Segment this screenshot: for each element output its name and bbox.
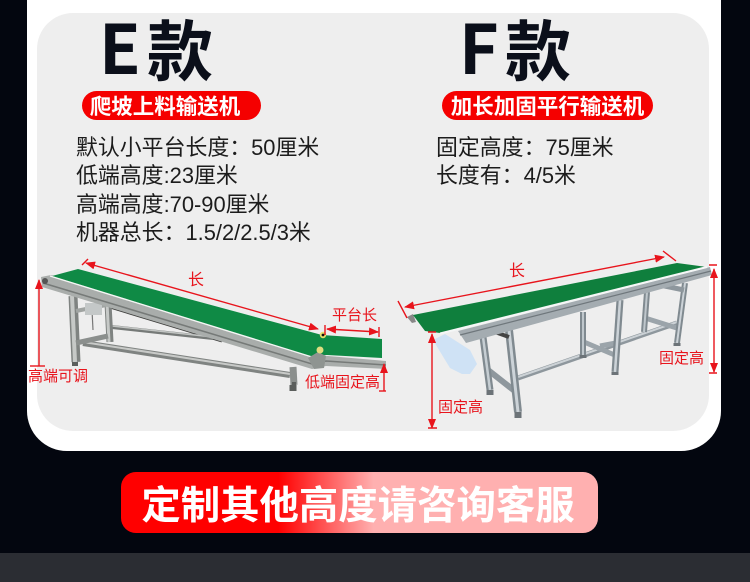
dimension labels E: 低端固定高 — [305, 371, 380, 392]
dimension labels F — [438, 257, 704, 417]
text block: model E specs: 默认小平台长度：50厘米 — [76, 135, 319, 160]
dimension labels E: 平台长 — [332, 304, 377, 325]
footer strip — [0, 553, 750, 582]
machine E belt and rail — [41, 269, 386, 369]
dimensions E — [30, 259, 386, 391]
label: model F type: 加长加固平行输送机 — [451, 90, 644, 121]
dimension labels F: 固定高 — [659, 347, 704, 368]
machine E frame — [72, 296, 296, 391]
text block: model E specs — [76, 135, 319, 245]
heading: model F: 款 — [505, 0, 571, 95]
machine F belt and rail — [407, 263, 712, 374]
dimension labels E: 长 — [188, 266, 204, 290]
heading: model F — [459, 0, 571, 95]
text block: model F specs: 长度有：4/5米 — [436, 163, 576, 188]
text block: model E specs: 高端高度:70-90厘米 — [76, 192, 269, 217]
dimension labels F: 长 — [509, 257, 525, 281]
dimension labels F: 固定高 — [438, 396, 483, 417]
text block: model F specs: 固定高度：75厘米 — [436, 135, 614, 160]
heading: model E: 款 — [147, 0, 213, 95]
label: model E type: 爬坡上料输送机 — [90, 90, 240, 121]
text block: model F specs — [436, 135, 614, 188]
text block: model E specs: 机器总长：1.5/2/2.5/3米 — [76, 220, 311, 245]
dimensions F — [398, 251, 717, 428]
machine F frame — [483, 283, 685, 418]
callout: custom height banner: 定制其他高度请咨询客服 — [141, 474, 575, 531]
heading: model E — [99, 0, 213, 95]
dimension labels E — [28, 266, 380, 392]
panel: white card — [27, 0, 721, 451]
text block: model E specs: 低端高度:23厘米 — [76, 163, 238, 188]
panel: grey content area — [37, 13, 709, 431]
dimension labels E: 高端可调 — [28, 365, 88, 386]
